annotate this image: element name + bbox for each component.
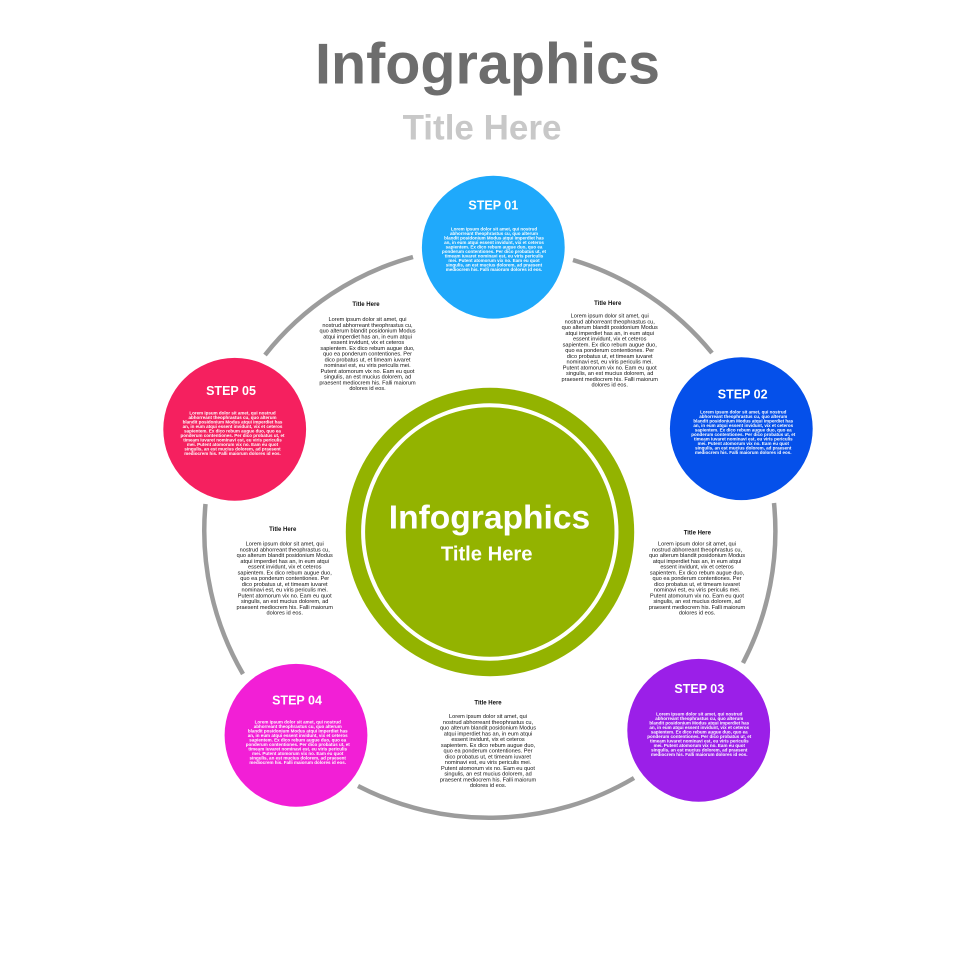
step 03 label: STEP 03 bbox=[674, 682, 724, 696]
step 01 text: ponderum contentiones. Per dico probatus ut, et bbox=[442, 249, 547, 254]
text block between steps 2 and 3: quo alterum blandit posidonium Modus bbox=[649, 553, 745, 559]
step 02 text: an, in eum atqui essent invidunt, vix et ceteros bbox=[693, 423, 794, 428]
text block between steps 2 and 3 bbox=[649, 531, 746, 617]
text block between steps 5 and 1: quo ea ponderum contentiones. Per bbox=[323, 352, 412, 358]
step 04 text: abhorreant theophrastus cu, quo alterum bbox=[254, 724, 342, 729]
step 04 text: mediocrem his. Falli maiorum dolores id eos. bbox=[249, 760, 346, 765]
text block between steps 5 and 1: dolores id eos. bbox=[349, 386, 386, 392]
step 02 label: STEP 02 bbox=[718, 388, 768, 402]
text block between steps 3 and 4: singulis, an est mucius dolorem, ad bbox=[444, 772, 532, 778]
step 02 text: abhorreant theophrastus cu, quo alterum bbox=[699, 414, 787, 419]
text block between steps 5 and 1: dico probatus ut, et timeam iuvaret bbox=[325, 357, 411, 363]
text block between steps 3 and 4: quo ea ponderum contentiones. Per bbox=[444, 748, 533, 754]
text block between steps 3 and 4: quo alterum blandit posidonium Modus bbox=[440, 726, 536, 732]
step 04 text: mei. Putent atomorum vix no. Eam eu quot bbox=[252, 751, 344, 756]
center circle bbox=[346, 388, 634, 676]
step 05 text: blandit posidonium Modus atqui imperdiet has bbox=[183, 420, 283, 424]
step 03 text: an, in eum atqui essent invidunt, vix et ceteros bbox=[649, 725, 750, 730]
subtitle: Title Here bbox=[403, 108, 561, 148]
text block between steps 3 and 4: praesent mediocrem his. Falli maiorum bbox=[440, 777, 537, 783]
step 01 text: an, in eum atqui essent invidunt, vix et ceteros bbox=[444, 240, 544, 245]
text block between steps 5 and 1: nominavi est, eu viris periculis mei. bbox=[324, 363, 411, 369]
step 03 circle bbox=[627, 659, 770, 802]
text block between steps 1 and 2: praesent mediocrem his. Falli maiorum bbox=[562, 377, 658, 383]
text block between steps 2 and 3: Title Here bbox=[684, 531, 712, 537]
step 01 text: singulis, an est mucius dolorem, ad praesent bbox=[446, 262, 543, 268]
text block between steps 4 and 5: singulis, an est mucius dolorem, ad bbox=[241, 599, 328, 605]
text block between steps 4 and 5: quo ea ponderum contentiones. Per bbox=[240, 576, 329, 582]
step 01 text: blandit posidonium Modus atqui imperdiet has bbox=[444, 236, 544, 240]
step 03 text: mediocrem his. Falli maiorum dolores id eos. bbox=[651, 752, 748, 757]
step 04 text: timeam iuvaret nominavi est, eu viris periculis bbox=[248, 746, 347, 752]
text block between steps 1 and 2: nominavi est, eu viris periculis mei. bbox=[566, 360, 653, 366]
text block between steps 4 and 5: dico probatus ut, et timeam iuvaret bbox=[242, 582, 328, 588]
text block between steps 2 and 3: nominavi est, eu viris periculis mei. bbox=[654, 588, 741, 594]
text block between steps 1 and 2: dico probatus ut, et timeam iuvaret bbox=[567, 354, 653, 360]
step 03 text: singulis, an est mucius dolorem, ad praesent bbox=[651, 748, 748, 752]
step 01 text: timeam iuvaret nominavi est, eu viris periculis bbox=[445, 254, 544, 258]
step 04 text: singulis, an est mucius dolorem, ad praesent bbox=[250, 756, 346, 760]
text block between steps 4 and 5: praesent mediocrem his. Falli maiorum bbox=[237, 605, 333, 611]
step 02 text: mei. Putent atomorum vix no. Eam eu quot bbox=[698, 441, 789, 446]
step 04 text: sapientem. Ex dico rebum augue duo, quo ea bbox=[249, 738, 347, 742]
text block between steps 3 and 4: essent invidunt, vix et ceteros bbox=[451, 737, 525, 743]
text block between steps 2 and 3: essent invidunt, vix et ceteros bbox=[660, 565, 734, 571]
step 01 circle bbox=[422, 176, 565, 319]
step 04 text: ponderum contentiones. Per dico probatus ut, et bbox=[246, 742, 350, 747]
text block between steps 5 and 1: Title Here bbox=[352, 302, 380, 308]
step 03 text: mei. Putent atomorum vix no. Eam eu quot bbox=[654, 743, 745, 748]
text block between steps 2 and 3: Lorem ipsum dolor sit amet, qui bbox=[658, 542, 736, 548]
text block between steps 2 and 3: dolores id eos. bbox=[679, 611, 716, 617]
text block between steps 5 and 1: sapientem. Ex dico rebum augue duo, bbox=[320, 346, 415, 352]
text block between steps 1 and 2: quo alterum blandit posidonium Modus bbox=[562, 325, 658, 331]
step 05 text: Lorem ipsum dolor sit amet, qui nostrud bbox=[189, 410, 276, 416]
text block between steps 1 and 2: dolores id eos. bbox=[592, 383, 628, 389]
text block between steps 1 and 2: atqui imperdiet has an, in eum atqui bbox=[565, 331, 654, 337]
step 02 text: Lorem ipsum dolor sit amet, qui nostrud bbox=[700, 410, 787, 414]
text block between steps 1 and 2: Lorem ipsum dolor sit amet, qui bbox=[571, 314, 649, 320]
text block between steps 5 and 1: essent invidunt, vix et ceteros bbox=[331, 340, 404, 346]
text block between steps 4 and 5: dolores id eos. bbox=[267, 611, 303, 617]
step 04 text: an, in eum atqui essent invidunt, vix et ceteros bbox=[248, 733, 348, 738]
text block between steps 2 and 3: Putent atomorum vix no. Eam eu quot bbox=[650, 593, 744, 599]
text block between steps 1 and 2: Putent atomorum vix no. Eam eu quot bbox=[563, 365, 657, 371]
step 03 text: ponderum contentiones. Per dico probatus ut, et bbox=[647, 734, 752, 739]
step 01 text: mediocrem his. Falli maiorum dolores id eos. bbox=[446, 267, 542, 272]
text block between steps 5 and 1 bbox=[319, 302, 416, 392]
step 01 label: STEP 01 bbox=[468, 198, 518, 212]
text block between steps 3 and 4: dico probatus ut, et timeam iuvaret bbox=[445, 754, 531, 760]
step 05 text: timeam iuvaret nominavi est, eu viris periculis bbox=[183, 438, 282, 442]
text block between steps 5 and 1: atqui imperdiet has an, in eum atqui bbox=[323, 334, 412, 340]
text block between steps 2 and 3: sapientem. Ex dico rebum augue duo, bbox=[650, 570, 745, 576]
text block between steps 4 and 5: Putent atomorum vix no. Eam eu quot bbox=[238, 593, 332, 599]
step 03 text: timeam iuvaret nominavi est, eu viris periculis bbox=[650, 738, 749, 744]
step 01 text: Lorem ipsum dolor sit amet, qui nostrud bbox=[451, 226, 537, 232]
step 02 text: timeam iuvaret nominavi est, eu viris periculis bbox=[694, 436, 793, 442]
text block between steps 5 and 1: praesent mediocrem his. Falli maiorum bbox=[319, 380, 416, 386]
text block between steps 3 and 4: nominavi est, eu viris periculis mei. bbox=[445, 760, 532, 766]
center subheading: Title Here bbox=[441, 544, 533, 566]
step 05 circle bbox=[163, 358, 306, 501]
text block between steps 3 and 4: Putent atomorum vix no. Eam eu quot bbox=[441, 766, 535, 772]
text block between steps 4 and 5: Lorem ipsum dolor sit amet, qui bbox=[246, 542, 324, 548]
text block between steps 4 and 5 bbox=[237, 527, 333, 617]
text block between steps 3 and 4: nostrud abhorreant theophrastus cu, bbox=[443, 720, 534, 726]
text block between steps 4 and 5: quo alterum blandit posidonium Modus bbox=[237, 553, 333, 559]
text block between steps 3 and 4: sapientem. Ex dico rebum augue duo, bbox=[441, 743, 536, 749]
text block between steps 5 and 1: Putent atomorum vix no. Eam eu quot bbox=[321, 369, 415, 375]
text block between steps 1 and 2: essent invidunt, vix et ceteros bbox=[573, 337, 647, 343]
text block between steps 1 and 2: singulis, an est mucius dolorem, ad bbox=[566, 371, 653, 377]
step 05 text: abhorreant theophrastus cu, quo alterum bbox=[188, 415, 277, 420]
text block between steps 1 and 2: Title Here bbox=[594, 301, 622, 307]
text block between steps 5 and 1: singulis, an est mucius dolorem, ad bbox=[324, 374, 411, 380]
step 03 text: sapientem. Ex dico rebum augue duo, quo ea bbox=[651, 730, 748, 734]
text block between steps 3 and 4 bbox=[440, 700, 537, 789]
ring: arc segments between steps bbox=[204, 257, 775, 818]
text block between steps 4 and 5: essent invidunt, vix et ceteros bbox=[248, 565, 322, 571]
step 04 text: blandit posidonium Modus atqui imperdiet has bbox=[248, 728, 348, 734]
step 03 text: Lorem ipsum dolor sit amet, qui nostrud bbox=[656, 712, 743, 716]
text block between steps 5 and 1: nostrud abhorreant theophrastus cu, bbox=[322, 323, 413, 329]
step 01 text: abhorreant theophrastus cu, quo alterum bbox=[450, 231, 538, 236]
step 01 text: sapientem. Ex dico rebum augue duo, quo ea bbox=[446, 244, 543, 250]
text block between steps 4 and 5: atqui imperdiet has an, in eum atqui bbox=[240, 559, 329, 565]
step 02 circle bbox=[670, 357, 813, 500]
step 02 text: singulis, an est mucius dolorem, ad praesent bbox=[695, 446, 792, 450]
center heading: Infographics bbox=[389, 499, 590, 536]
step 02 text: sapientem. Ex dico rebum augue duo, quo ea bbox=[695, 428, 792, 432]
text block between steps 2 and 3: nostrud abhorreant theophrastus cu, bbox=[652, 547, 743, 553]
text block between steps 4 and 5: sapientem. Ex dico rebum augue duo, bbox=[238, 570, 332, 576]
text block between steps 2 and 3: singulis, an est mucius dolorem, ad bbox=[653, 599, 741, 605]
step 05 text: ponderum contentiones. Per dico probatus ut, et bbox=[180, 433, 285, 438]
text block between steps 2 and 3: atqui imperdiet has an, in eum atqui bbox=[653, 559, 741, 565]
text block between steps 3 and 4: Lorem ipsum dolor sit amet, qui bbox=[449, 714, 527, 720]
text block between steps 3 and 4: Title Here bbox=[474, 700, 502, 706]
step 04 label: STEP 04 bbox=[272, 694, 322, 708]
step 05 text: mediocrem his. Falli maiorum dolores id eos. bbox=[184, 451, 281, 456]
text block between steps 3 and 4: atqui imperdiet has an, in eum atqui bbox=[444, 731, 532, 737]
text block between steps 2 and 3: quo ea ponderum contentiones. Per bbox=[653, 576, 742, 582]
text block between steps 1 and 2: quo ea ponderum contentiones. Per bbox=[565, 348, 654, 354]
step 01 text: mei. Putent atomorum vix no. Eam eu quot bbox=[448, 258, 540, 263]
title: Infographics bbox=[315, 32, 660, 96]
text block between steps 1 and 2: sapientem. Ex dico rebum augue duo, bbox=[563, 342, 657, 348]
text block between steps 2 and 3: dico probatus ut, et timeam iuvaret bbox=[654, 582, 740, 588]
step 05 text: an, in eum atqui essent invidunt, vix et ceteros bbox=[183, 424, 283, 429]
step 04 text: Lorem ipsum dolor sit amet, qui nostrud bbox=[255, 720, 341, 724]
text block between steps 2 and 3: praesent mediocrem his. Falli maiorum bbox=[649, 605, 746, 611]
step 02 text: blandit posidonium Modus atqui imperdiet has bbox=[693, 418, 794, 424]
text block between steps 3 and 4: dolores id eos. bbox=[470, 783, 507, 789]
step 02 text: mediocrem his. Falli maiorum dolores id eos. bbox=[695, 450, 792, 455]
text block between steps 1 and 2 bbox=[562, 301, 658, 389]
step 03 text: abhorreant theophrastus cu, quo alterum bbox=[655, 716, 743, 721]
step 04 circle bbox=[225, 664, 367, 807]
step 05 text: singulis, an est mucius dolorem, ad praesent bbox=[184, 446, 281, 452]
text block between steps 4 and 5: nostrud abhorreant theophrastus cu, bbox=[240, 547, 330, 553]
text block between steps 5 and 1: Lorem ipsum dolor sit amet, qui bbox=[328, 317, 407, 323]
text block between steps 1 and 2: nostrud abhorreant theophrastus cu, bbox=[565, 319, 655, 325]
text block between steps 4 and 5: Title Here bbox=[269, 527, 297, 533]
step 02 text: ponderum contentiones. Per dico probatus ut, et bbox=[691, 432, 796, 437]
text block between steps 4 and 5: nominavi est, eu viris periculis mei. bbox=[241, 588, 328, 594]
step 05 label: STEP 05 bbox=[206, 384, 256, 398]
text block between steps 5 and 1: quo alterum blandit posidonium Modus bbox=[319, 328, 416, 334]
step 05 text: sapientem. Ex dico rebum augue duo, quo ea bbox=[184, 428, 281, 434]
step 03 text: blandit posidonium Modus atqui imperdiet has bbox=[649, 720, 750, 726]
step 05 text: mei. Putent atomorum vix no. Eam eu quot bbox=[187, 442, 279, 447]
